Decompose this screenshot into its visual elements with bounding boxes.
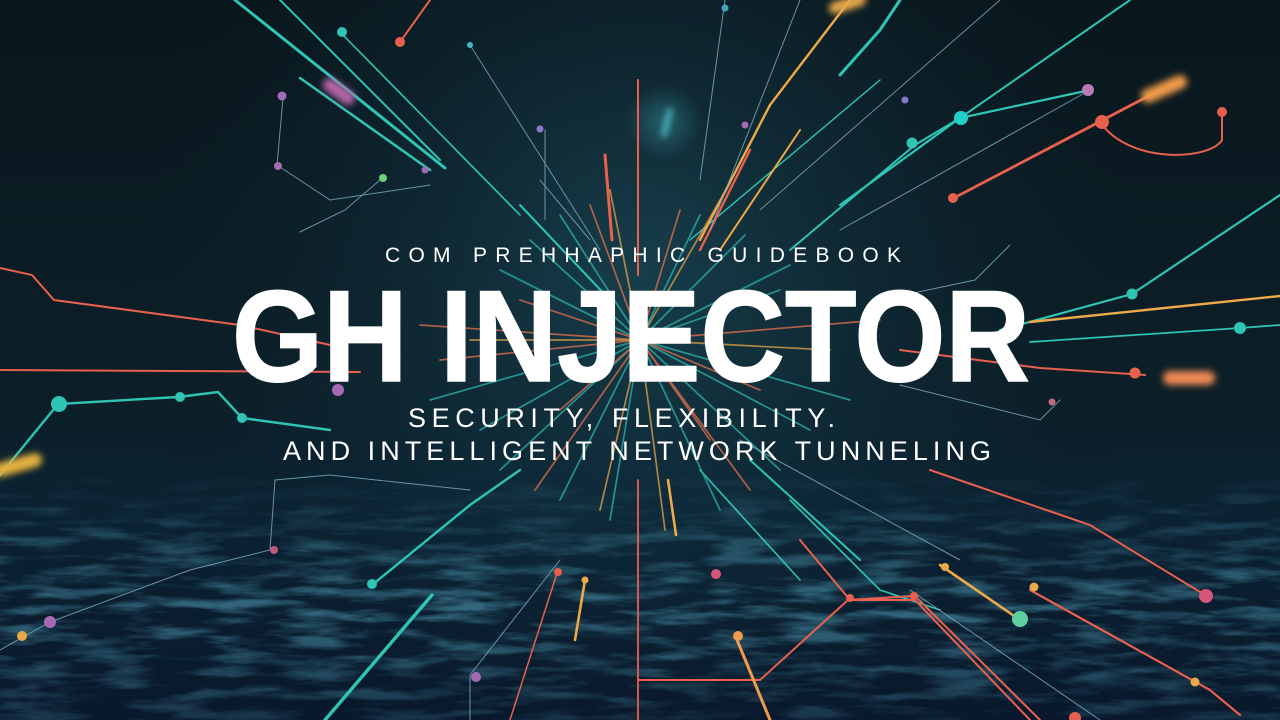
subtitle line two: AND INTELLIGENT NETWORK TUNNELING: [283, 436, 991, 466]
eyebrow: COM PREHHAPHIC GUIDEBOOK: [385, 244, 901, 267]
glowing line ends: [0, 0, 1208, 470]
title block: [232, 244, 1030, 466]
central burst: [420, 190, 880, 530]
subtitle line one: SECURITY, FLEXIBILITY.: [408, 403, 835, 433]
main title: GH INJECTOR: [232, 263, 1030, 409]
radiating network lines: amber: [575, 0, 1280, 640]
wave terrain: [0, 470, 1280, 720]
